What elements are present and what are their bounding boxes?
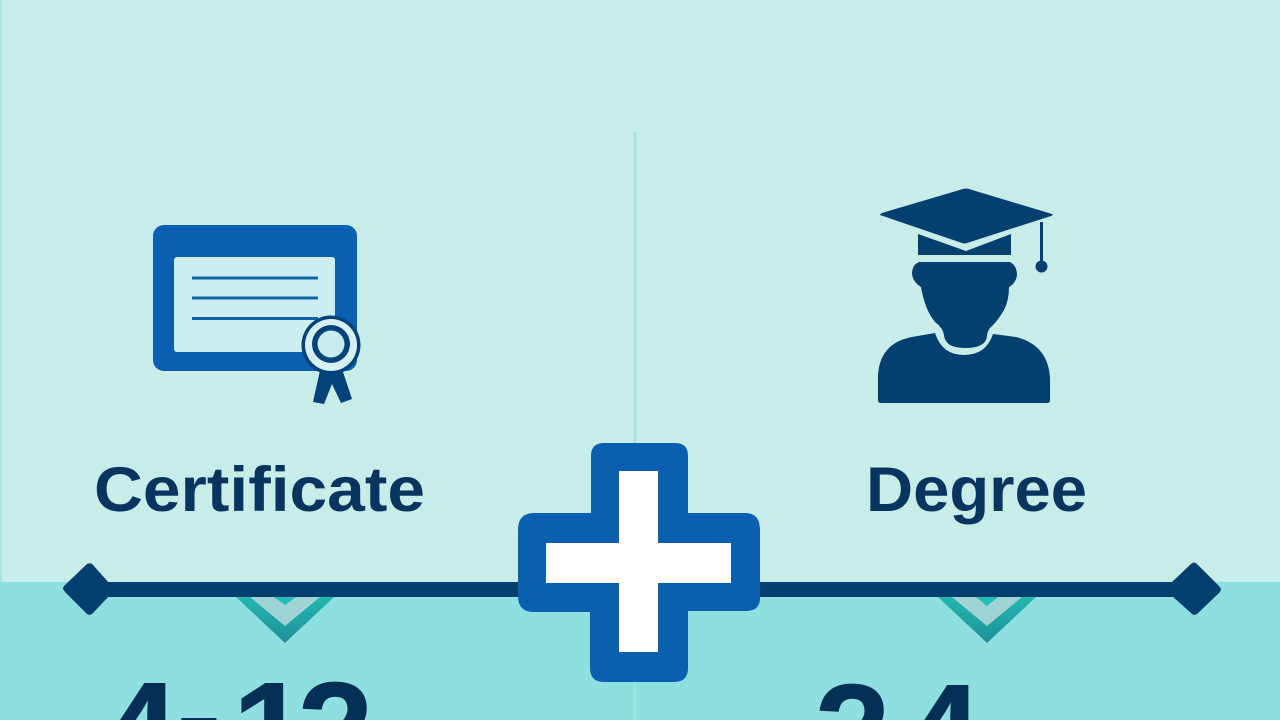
icon: shoulders xyxy=(878,333,1050,403)
icon: cap base xyxy=(918,234,1011,255)
icon: certificate xyxy=(153,225,360,404)
vertical divider xyxy=(634,132,636,720)
icon: rosette seal xyxy=(302,316,360,374)
icon: cap board xyxy=(880,188,1053,244)
pointer: right chevron xyxy=(938,597,1036,643)
heading: Certificate: Certificate xyxy=(94,455,425,525)
icon: plus xyxy=(518,443,760,682)
timeline: right end diamond xyxy=(1172,562,1221,615)
timeline xyxy=(63,562,1221,615)
background: lower panel xyxy=(0,582,1280,720)
icon: tassel xyxy=(1036,222,1048,272)
timeline: left end diamond xyxy=(63,563,110,615)
icon: graduate xyxy=(878,188,1053,403)
pointer: left chevron xyxy=(236,597,334,643)
stat: 4-12 xyxy=(120,682,367,720)
heading: Degree: Degree xyxy=(866,455,1087,525)
icon: ribbon tails xyxy=(313,366,352,404)
icon: head xyxy=(912,262,1017,348)
stat: 24 xyxy=(820,684,968,720)
